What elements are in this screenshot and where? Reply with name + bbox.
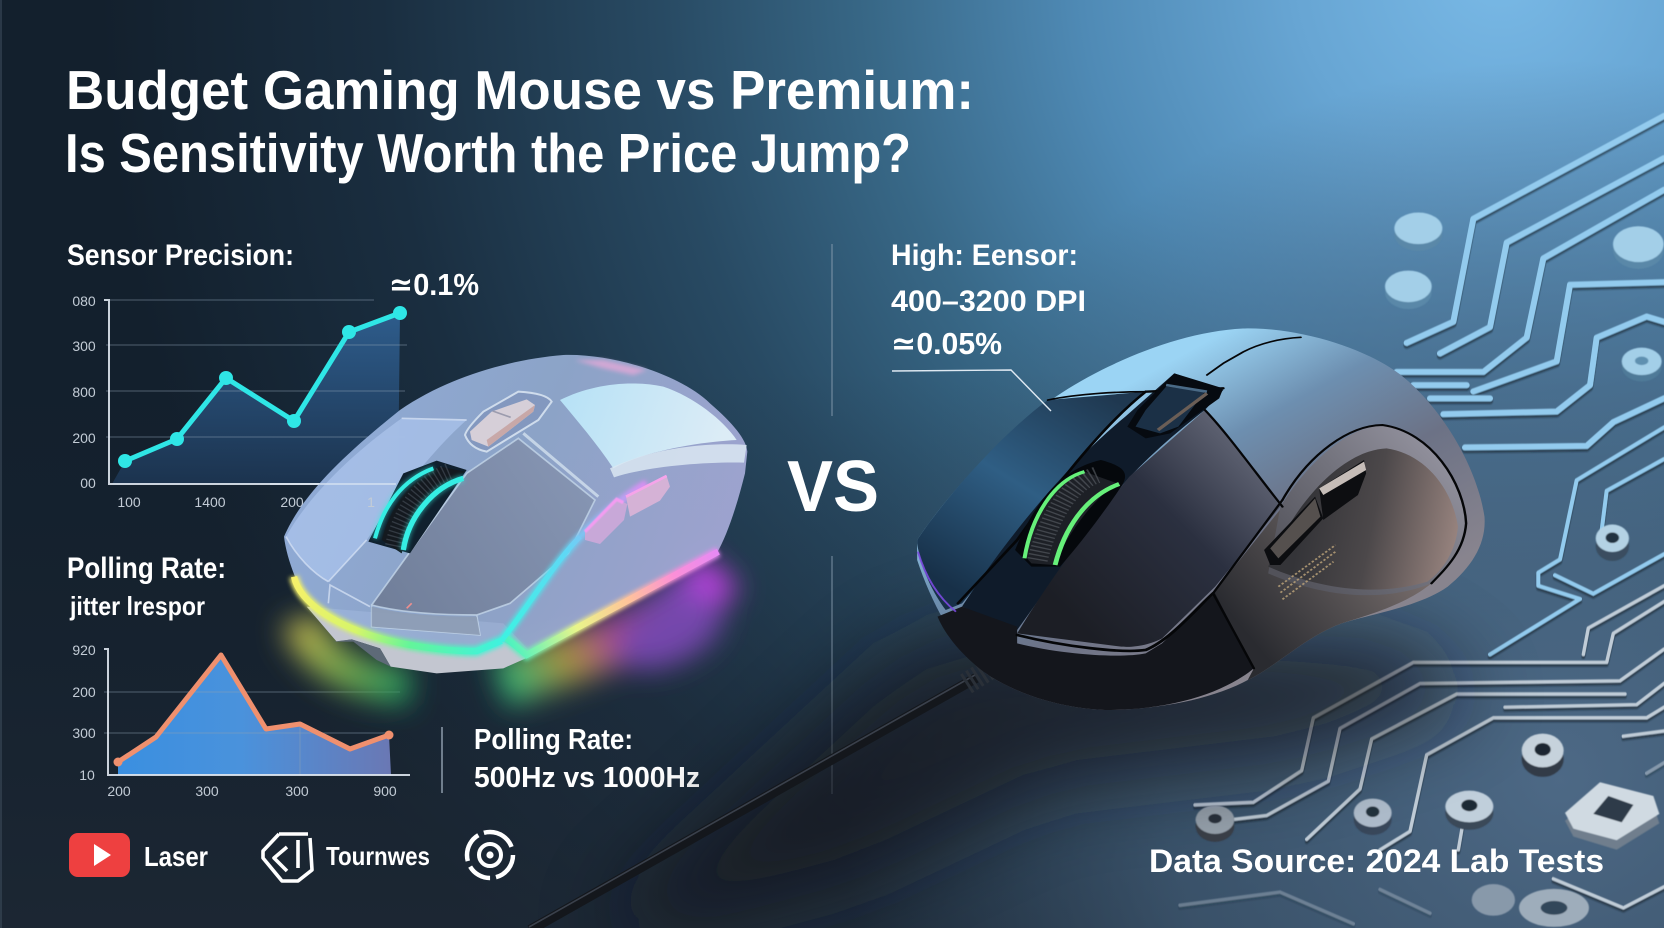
line chart: sensor precision: 200: [280, 494, 304, 510]
area chart: polling rate: 920: [72, 642, 96, 658]
underside: [307, 607, 533, 673]
left button: [286, 418, 467, 582]
overlay: chart baseline seen through budget mouse: 1: [367, 494, 375, 510]
polling rate comparison divider: [441, 727, 443, 793]
area chart: polling rate: 300: [72, 725, 96, 741]
dpi buttons: [465, 392, 552, 452]
front lip: [372, 607, 480, 635]
spec text: premium sensor: 400–3200 DPI: [891, 285, 1086, 318]
shell highlight: [560, 383, 737, 468]
center band: [962, 373, 1223, 630]
line chart: sensor precision: 00: [80, 475, 96, 491]
comparison text: polling rate: [474, 724, 700, 794]
thumb ring: [1268, 425, 1466, 595]
title: Budget Gaming Mouse vs Premium:: [66, 59, 974, 121]
logo mark: [575, 360, 647, 375]
area chart: polling rate: 300: [195, 783, 219, 799]
area chart: polling rate: 10: [79, 767, 95, 783]
purple edge glow: [918, 552, 956, 612]
scroll wheel: [368, 461, 467, 553]
overlay: chart baseline seen through budget mouse: [270, 484, 396, 510]
seams: [958, 337, 1466, 668]
line chart: sensor precision: 300: [72, 338, 96, 354]
footer label: tournwes: Tournwes: [326, 841, 430, 871]
comparison text: polling rate: 500Hz vs 1000Hz: [474, 762, 700, 794]
spec text: premium sensor: ≃0.05%: [891, 326, 1002, 361]
line chart: sensor precision: 1400: [194, 494, 226, 510]
footer icon: segmented target ring: [467, 832, 513, 878]
spec text: premium sensor: [891, 239, 1086, 361]
shell: [284, 355, 747, 657]
shell band: [610, 444, 747, 477]
comparison text: polling rate: Polling Rate:: [474, 724, 633, 756]
title: Is Sensitivity Worth the Price Jump?: [65, 122, 911, 184]
lower right flank: [1213, 507, 1431, 680]
premium mouse shadow and cable: [529, 620, 1480, 928]
line chart: sensor precision: 200: [72, 430, 96, 446]
vs label: VS: [787, 447, 879, 527]
line chart: sensor precision: 100: [117, 494, 141, 510]
center divider bottom: [831, 556, 833, 794]
thumb inner: [1268, 448, 1458, 590]
rgb floor glow: [300, 570, 734, 687]
heading: polling rate with jitter note: jitter lrespor: [69, 591, 205, 621]
left button: [917, 392, 1146, 610]
data source note: Data Source: 2024 Lab Tests: [1149, 843, 1604, 879]
scroll wheel: [1015, 460, 1125, 567]
area chart: polling rate: 200: [72, 684, 96, 700]
center divider top: [831, 244, 833, 416]
line chart: sensor precision: 080: [72, 293, 96, 309]
spec text: premium sensor: High: Eensor:: [891, 239, 1078, 272]
area chart: polling rate: 200: [107, 783, 131, 799]
side buttons: [1264, 460, 1366, 565]
dpi button: [1127, 373, 1223, 438]
side buttons: [585, 499, 627, 544]
heading: polling rate with jitter note: [67, 552, 226, 621]
area chart: polling rate: 300: [285, 783, 309, 799]
line chart: sensor precision: 800: [72, 384, 96, 400]
area chart: polling rate: [72, 642, 410, 799]
circuit pads: [1196, 212, 1664, 927]
area chart: polling rate: 900: [373, 783, 397, 799]
right button: [1017, 410, 1280, 647]
heading: sensor precision: Sensor Precision:: [67, 239, 294, 272]
light strips: [294, 483, 718, 655]
footer label: laser: Laser: [144, 841, 208, 872]
shell: [917, 328, 1485, 710]
right button: [372, 438, 595, 615]
heading: polling rate with jitter note: Polling Rate:: [67, 552, 226, 585]
leader line to premium mouse: [892, 370, 1051, 411]
circuit board traces: [1180, 116, 1664, 927]
value label: budget precision: ≃0.1%: [389, 267, 479, 302]
footer icon: red play button: [69, 833, 130, 877]
budget mouse: translucent with RGB lighting: [284, 355, 747, 687]
lower front: [938, 593, 1254, 710]
premium mouse: black ergonomic: [917, 328, 1485, 710]
footer icon: angular shield logo: [263, 834, 312, 881]
engraved side text: [1278, 545, 1336, 599]
title: [65, 59, 974, 184]
line chart: sensor precision: [72, 293, 407, 510]
